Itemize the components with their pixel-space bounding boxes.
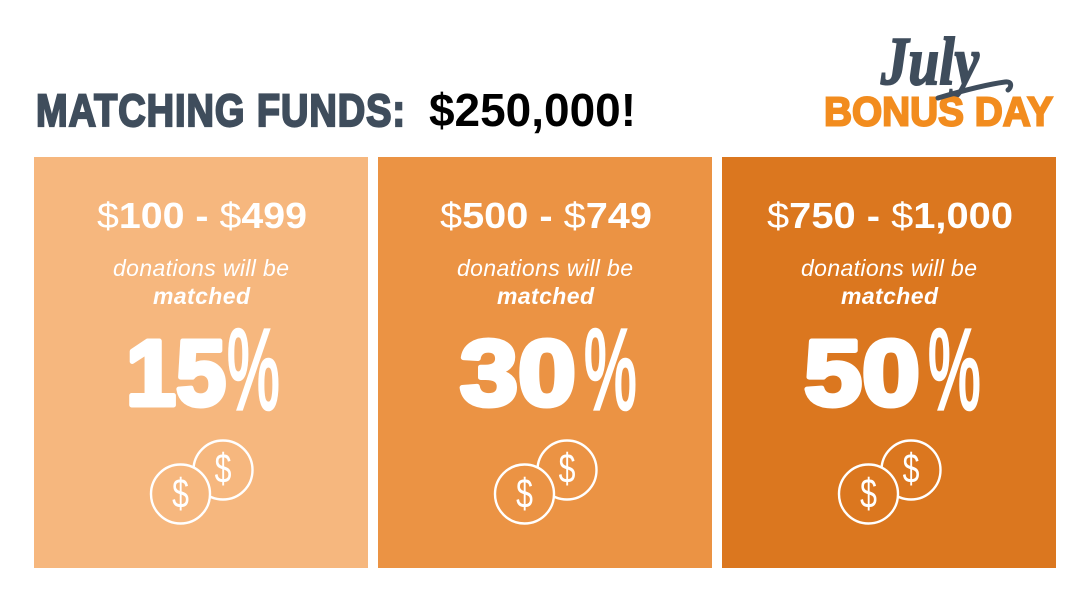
icon: coins: $ xyxy=(215,445,231,492)
percentage: 50 xyxy=(804,321,920,425)
matched text: matched xyxy=(841,283,939,309)
matched text: matched xyxy=(153,283,251,309)
donation range: $500 - $749 xyxy=(440,195,652,236)
icon: coins xyxy=(495,440,596,524)
icon: coins: $ xyxy=(903,445,919,492)
panel: 50% tier xyxy=(722,157,1056,568)
donation range: $100 - $499 xyxy=(97,195,307,236)
percentage: % xyxy=(584,307,637,434)
matched text: donations will be xyxy=(457,255,633,281)
icon: coins: $ xyxy=(516,470,533,517)
matched text xyxy=(801,255,977,309)
icon: coins xyxy=(151,440,252,524)
logo: July Bonus Day: BONUS DAY xyxy=(824,88,1053,134)
logo: July Bonus Day: July xyxy=(880,23,980,99)
title: matching funds: MATCHING FUNDS: xyxy=(36,85,405,136)
percentage xyxy=(460,307,637,434)
matched text xyxy=(457,255,633,309)
title: matching funds xyxy=(36,84,636,136)
icon: coins: $ xyxy=(172,470,189,517)
percentage: % xyxy=(227,307,280,434)
icon: coins xyxy=(839,440,940,524)
matched text xyxy=(113,255,289,309)
icon: coins: $ xyxy=(559,445,575,492)
percentage: 30 xyxy=(460,321,576,425)
percentage: 15 xyxy=(126,321,226,425)
title: matching funds: $250,000! xyxy=(429,84,636,136)
matched text: donations will be xyxy=(113,255,289,281)
logo: July Bonus Day xyxy=(824,23,1053,134)
donation range: $750 - $1,000 xyxy=(767,195,1013,236)
panel: 15% tier xyxy=(34,157,368,568)
icon: coins: $ xyxy=(860,470,877,517)
matched text: matched xyxy=(497,283,595,309)
percentage xyxy=(804,307,981,434)
percentage: % xyxy=(928,307,981,434)
percentage xyxy=(126,307,280,434)
panel: 30% tier xyxy=(378,157,712,568)
matched text: donations will be xyxy=(801,255,977,281)
